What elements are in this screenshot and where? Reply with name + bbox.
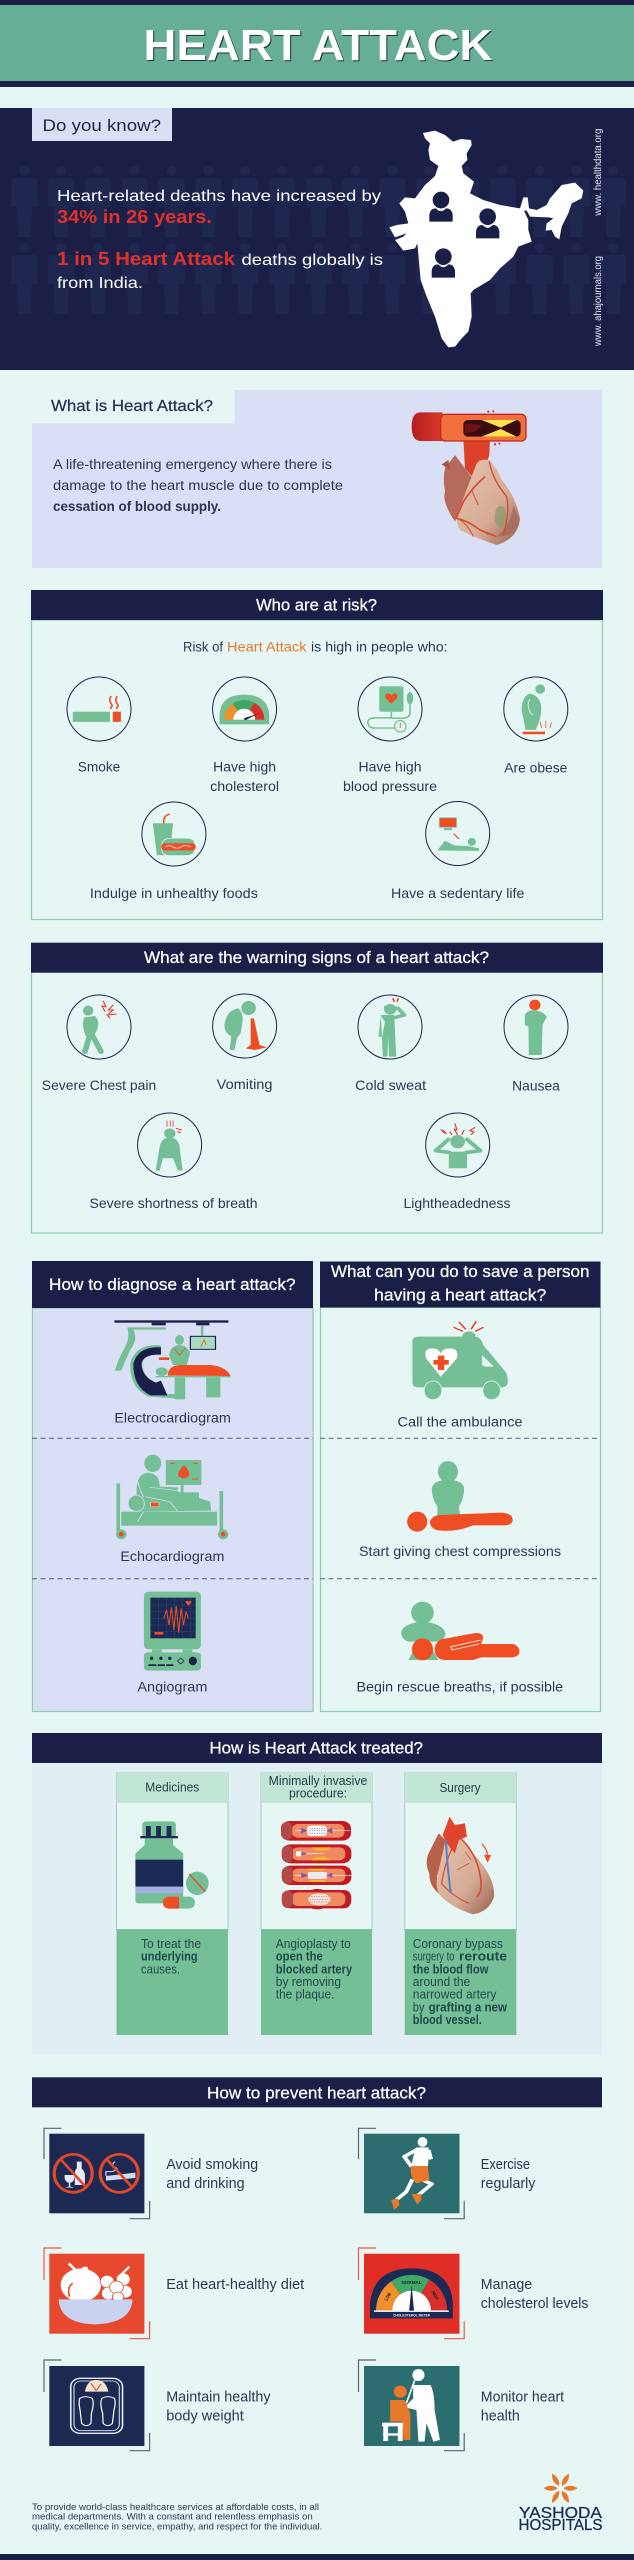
heading: how to diagnose [32, 1261, 313, 1308]
item: maintain healthy body weight: Maintain healthy [166, 2388, 271, 2405]
item: call the ambulance [398, 1321, 523, 1430]
card: surgery: narrowed artery [413, 1987, 497, 2002]
item: lightheadedness [404, 1113, 510, 1211]
heading: who are at risk [31, 590, 603, 620]
item: chest compressions [359, 1461, 561, 1559]
heading: prevention [32, 2077, 602, 2107]
item: electrocardiogram [114, 1320, 231, 1426]
text block: statistics: from India. [57, 275, 143, 292]
card: surgery [405, 1773, 516, 2035]
card: surgery: by [413, 1999, 425, 2014]
card: medicines: causes. [141, 1961, 180, 1976]
card: minimally invasive procedure: Angioplasty to [276, 1936, 351, 1951]
item: high blood pressure: blood pressure [343, 778, 437, 794]
card: medicines: To treat the [141, 1936, 201, 1951]
item: manage cholesterol levels: cholesterol levels [481, 2295, 588, 2312]
card: surgery: grafting a new [429, 1999, 508, 2014]
heading: treatment [32, 1733, 602, 1763]
heading: do you know [32, 108, 172, 141]
icon: cholesterol meter: CHOLESTEROL METER [393, 2313, 430, 2318]
item: nausea [504, 995, 568, 1094]
item: obese [504, 677, 568, 776]
icon: chest compression [407, 1461, 513, 1532]
heading: what is heart attack [32, 389, 234, 424]
icon: no alcohol no smoking [54, 2154, 138, 2192]
item: monitor heart health: Monitor heart [481, 2388, 565, 2405]
item: angiogram [137, 1592, 207, 1695]
card: surgery: Coronary bypass [413, 1936, 503, 1951]
icon: cholesterol gauge [220, 695, 269, 724]
item: manage cholesterol levels: Manage [481, 2276, 532, 2293]
item: angiogram: Angiogram [137, 1679, 207, 1695]
card: minimally invasive procedure: open the [276, 1949, 323, 1964]
item: high cholesterol: cholesterol [210, 778, 279, 794]
item: nausea: Nausea [512, 1078, 560, 1094]
text block: definition: A life-threatening emergency where there is [53, 456, 332, 472]
text block: statistics: 34% in 26 years. [57, 207, 212, 227]
icon: echo scan on bed [116, 1455, 228, 1539]
text block: risk intro: Heart Attack [227, 639, 308, 655]
source: ahajournals: www. ahajournals.org [593, 256, 604, 347]
card: minimally invasive procedure: by removing [276, 1974, 341, 1989]
card: minimally invasive procedure: Minimally invasive [269, 1773, 367, 1788]
card: medicines: underlying [141, 1949, 198, 1964]
icon: cholesterol meter: LOW [383, 2292, 394, 2302]
icon: runner [391, 2137, 432, 2210]
card: medicines [116, 1773, 228, 2035]
card: surgery: surgery to [413, 1949, 454, 1964]
heading: do you know: Do you know? [42, 116, 161, 135]
item: electrocardiogram: Electrocardiogram [114, 1410, 231, 1426]
item: lightheadedness: Lightheadedness [404, 1195, 510, 1211]
panel: how to prevent [32, 2077, 602, 2451]
item: sedentary life [391, 802, 525, 901]
source: healthdata: www. healthdata.org [593, 129, 604, 217]
icon: medicine bottle [135, 1821, 209, 1909]
panel: how to diagnose [32, 1261, 313, 1712]
item: echocardiogram [116, 1455, 228, 1564]
card: surgery: reroute [459, 1949, 507, 1964]
card: minimally invasive procedure: the plaque. [276, 1987, 334, 2002]
text block: statistics: Heart-related deaths have increased by [57, 188, 381, 205]
icon: fruit bowl [59, 2263, 133, 2324]
icon: cold sweat figure [378, 998, 404, 1057]
item: eat heart-healthy diet [44, 2248, 305, 2339]
icon: cholesterol meter [370, 2268, 453, 2318]
heading: what can you do: What can you do to save a person [331, 1262, 589, 1281]
item: high blood pressure [343, 677, 437, 794]
text block: statistics: 1 in 5 Heart Attack [57, 249, 236, 269]
item: smoke [67, 677, 131, 775]
icon: blood pressure monitor [368, 686, 413, 732]
panel: do you know [0, 108, 634, 370]
card: surgery: blood vessel. [413, 2012, 482, 2027]
item: high cholesterol [210, 677, 279, 794]
panel: warning signs [31, 943, 603, 1233]
text block: definition [53, 456, 343, 514]
item: echocardiogram: Echocardiogram [120, 1548, 224, 1564]
map: India [389, 131, 583, 347]
item: maintain healthy body weight: body weight [166, 2407, 245, 2424]
item: avoid smoking and drinking: Avoid smoking [166, 2156, 258, 2173]
icon: flower [544, 2472, 578, 2504]
icon: person watching tv [437, 818, 479, 851]
text block: statistics: deaths globally is [242, 252, 383, 269]
item: exercise regularly: Exercise [481, 2156, 530, 2173]
title banner [0, 0, 634, 87]
text block: mission statement: quality, excellence in service, empathy, and respect for the individual. [32, 2521, 322, 2532]
item: monitor heart health [358, 2360, 565, 2451]
item: sedentary life: Have a sedentary life [391, 885, 525, 901]
heading: who are at risk: Who are at risk? [256, 596, 377, 614]
logo: Yashoda Hospitals [518, 2472, 603, 2534]
item: vomiting [213, 994, 277, 1092]
icon: vomiting figure [224, 1001, 267, 1050]
icon: chest pain figure [83, 1001, 116, 1052]
logo: Yashoda Hospitals: YASHODA [519, 2505, 603, 2522]
title: HEART ATTACK [144, 21, 493, 70]
item: smoke: Smoke [78, 759, 120, 775]
item: monitor heart health: health [481, 2407, 520, 2424]
panel: what can you do [320, 1262, 600, 1712]
item: maintain healthy body weight [44, 2360, 271, 2451]
icon: ambulance [412, 1321, 508, 1400]
text block: definition: cessation of blood supply. [53, 498, 221, 514]
icon: catheterisation lab [114, 1320, 230, 1399]
item: avoid smoking and drinking [44, 2128, 258, 2219]
card: surgery: around the [413, 1974, 470, 1989]
panel: how is heart attack treated [32, 1733, 602, 2055]
icon: heart with blocked artery [412, 410, 526, 545]
item: manage cholesterol levels [358, 2248, 588, 2339]
text block: mission statement [32, 2502, 322, 2532]
item: severe chest pain: Severe Chest pain [42, 1077, 156, 1093]
item: vomiting: Vomiting [217, 1076, 272, 1092]
icon: nausea figure [525, 1000, 547, 1055]
icon: cholesterol meter: NORMAL [401, 2280, 422, 2286]
text block: risk intro: Risk of [183, 639, 223, 655]
item: unhealthy foods [90, 802, 258, 901]
card: minimally invasive procedure [261, 1773, 372, 2035]
heading: how to diagnose: How to diagnose a heart attack? [49, 1275, 296, 1294]
item: cold sweat [355, 995, 426, 1093]
icon: heart with bypass [427, 1817, 494, 1914]
item: call the ambulance: Call the ambulance [398, 1414, 523, 1430]
item: obese: Are obese [504, 760, 568, 776]
item: shortness of breath [90, 1113, 258, 1211]
item: exercise regularly [358, 2128, 536, 2219]
text block: risk intro [183, 639, 448, 655]
heading: what can you do [320, 1262, 600, 1308]
icon: breathless figure [156, 1121, 183, 1171]
item: eat heart-healthy diet: Eat heart-healthy diet [166, 2276, 305, 2293]
card: minimally invasive procedure: blocked artery [276, 1961, 353, 1976]
item: high cholesterol: Have high [213, 759, 276, 775]
icon: angioplasty stents [281, 1821, 351, 1909]
card: surgery: the blood flow [413, 1961, 489, 1976]
item: chest compressions: Start giving chest compressions [359, 1543, 561, 1559]
item: cold sweat: Cold sweat [355, 1077, 426, 1093]
heading: what is heart attack: What is Heart Attack? [51, 398, 213, 415]
text block: statistics [57, 188, 383, 292]
text block: mission statement: medical departments. With a constant and relentless emphasis on [32, 2512, 313, 2523]
icon: cardiac monitor [144, 1592, 201, 1671]
icon: rescue breaths [401, 1602, 520, 1660]
item: high blood pressure: Have high [358, 759, 422, 775]
heading: what can you do: having a heart attack? [374, 1286, 546, 1305]
text block: definition: damage to the heart muscle due to complete [53, 477, 343, 493]
icon: obese person [522, 684, 551, 734]
item: shortness of breath: Severe shortness of breath [90, 1195, 258, 1211]
item: avoid smoking and drinking: and drinking [166, 2175, 245, 2192]
item: exercise regularly: regularly [481, 2175, 536, 2192]
icon: doctor and patient [382, 2369, 440, 2442]
text block: mission statement: To provide world-class healthcare services at affordable costs, in all [32, 2502, 319, 2513]
icon: dizzy figure [436, 1123, 480, 1168]
panel: what is heart attack [32, 389, 602, 568]
card: medicines: Medicines [145, 1780, 200, 1795]
card: surgery: Surgery [440, 1780, 481, 1795]
text block: risk intro: is high in people who: [311, 639, 448, 655]
heading: treatment: How is Heart Attack treated? [209, 1738, 423, 1757]
heading: warning signs: What are the warning signs of a heart attack? [144, 948, 489, 967]
card: minimally invasive procedure: procedure: [289, 1786, 347, 1801]
item: rescue breaths [356, 1602, 563, 1695]
item: severe chest pain [42, 995, 156, 1093]
item: unhealthy foods: Indulge in unhealthy foods [90, 885, 258, 901]
icon: cholesterol meter: HIGH [429, 2290, 440, 2301]
heading: prevention: How to prevent heart attack? [207, 2083, 426, 2102]
icon: cigarette [73, 696, 121, 722]
icon: weighing scale [71, 2378, 123, 2433]
panel: who are at risk [31, 590, 603, 920]
logo: Yashoda Hospitals: HOSPITALS [518, 2517, 602, 2534]
item: rescue breaths: Begin rescue breaths, if possible [356, 1679, 563, 1695]
icon: fast food [153, 814, 196, 856]
heading: warning signs [31, 943, 603, 973]
